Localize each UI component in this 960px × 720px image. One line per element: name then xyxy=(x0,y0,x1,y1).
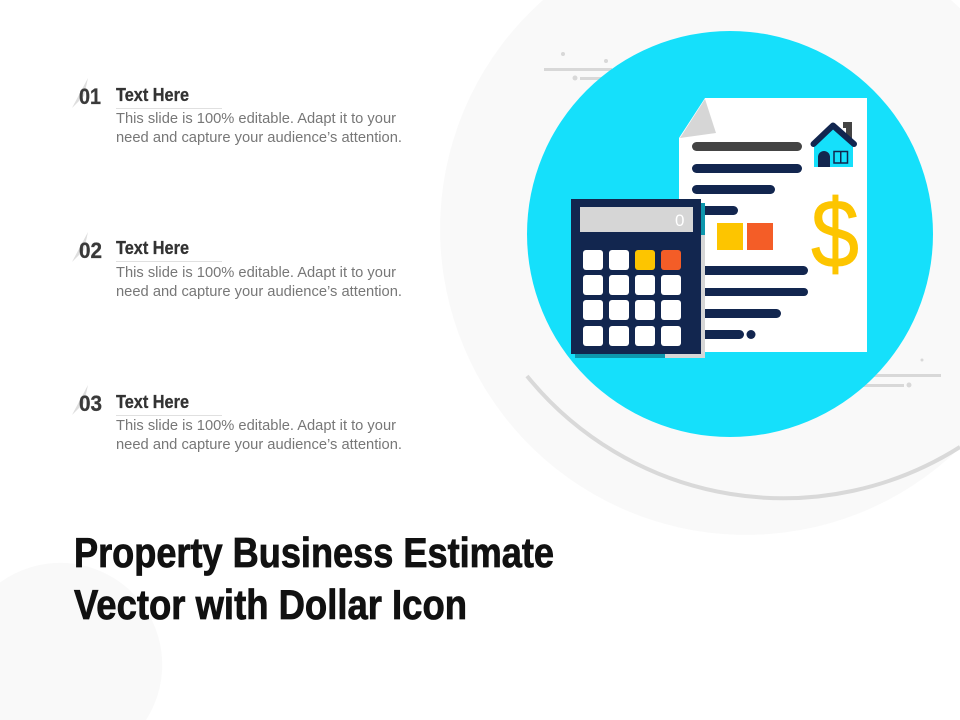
display digit: 0 xyxy=(675,211,684,230)
body text: need and capture your audience’s attention. xyxy=(116,129,402,146)
heading: Text Here xyxy=(116,238,189,258)
icon: house xyxy=(814,122,854,167)
body text: This slide is 100% editable. Adapt it to your xyxy=(116,417,396,434)
number wedge xyxy=(72,232,88,262)
body text: This slide is 100% editable. Adapt it to your xyxy=(116,110,396,127)
item 03 xyxy=(72,385,402,453)
text lines lower xyxy=(692,266,808,339)
calculator display xyxy=(580,207,693,232)
body text: need and capture your audience’s attention. xyxy=(116,283,402,300)
calculator body xyxy=(571,199,701,354)
heading: Text Here xyxy=(116,392,189,412)
number: 02 xyxy=(79,238,102,263)
body text: This slide is 100% editable. Adapt it to your xyxy=(116,264,396,281)
colour squares xyxy=(717,223,773,250)
decorative speed lines: bottom right xyxy=(850,358,941,388)
number wedge xyxy=(72,78,88,108)
number: 01 xyxy=(79,84,101,109)
background circle: bottom left xyxy=(0,563,162,720)
background circle: large xyxy=(440,0,960,535)
item 02 xyxy=(72,232,402,300)
curved arc xyxy=(527,376,960,498)
number: 03 xyxy=(79,391,102,416)
text lines upper xyxy=(692,142,802,215)
document page xyxy=(679,98,867,352)
heading: Text Here xyxy=(116,85,189,105)
page fold xyxy=(680,99,716,138)
icon: dollar sign: $ xyxy=(811,179,859,288)
icon: calculator xyxy=(571,199,705,358)
calculator shadow xyxy=(663,203,705,358)
title: Vector with Dollar Icon xyxy=(74,581,467,628)
item 01 xyxy=(72,78,402,146)
icon: document xyxy=(679,98,867,352)
title: Property Business Estimate xyxy=(74,529,554,576)
number wedge xyxy=(72,385,88,415)
decorative speed lines: top left xyxy=(544,52,612,80)
cyan circle xyxy=(527,31,933,437)
calculator keys xyxy=(583,250,681,346)
body text: need and capture your audience’s attention. xyxy=(116,436,402,453)
